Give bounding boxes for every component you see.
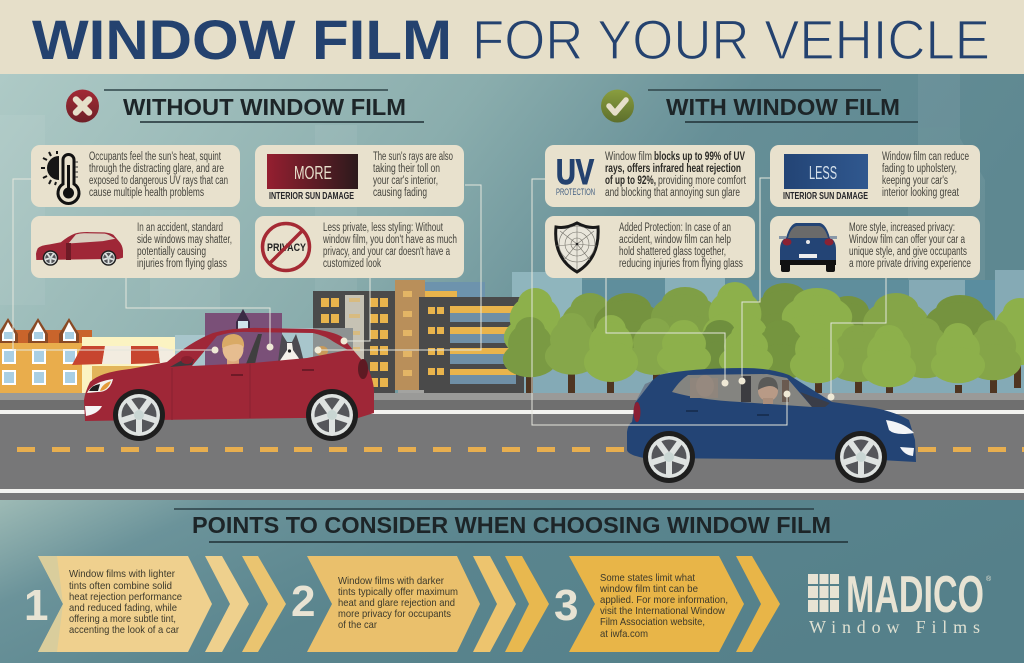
- number 1: 1: [24, 581, 48, 630]
- chevron 2: [307, 556, 480, 652]
- less damage badge: [783, 154, 868, 202]
- text: uv protection: blocks up to 99% of UV: [654, 151, 745, 163]
- connector lines: [13, 178, 886, 425]
- text: darker tints: tints typically offer maximum: [338, 587, 458, 598]
- tan building: [395, 280, 457, 390]
- less damage badge: INTERIOR SUN DAMAGE: [783, 191, 868, 202]
- text: interior fading: taking their toll on: [373, 163, 440, 175]
- text: less privacy: [322, 222, 457, 270]
- madico logo: ®: [986, 575, 992, 583]
- panel: interior damage with film: [770, 145, 980, 207]
- panel: interior damage without film: [255, 145, 464, 207]
- icon: car rear view: [779, 223, 837, 272]
- text: state limits: Some states limit what: [600, 573, 695, 584]
- panel: added protection: [545, 216, 755, 278]
- red car wheels: [113, 389, 165, 441]
- header band: [0, 0, 1024, 74]
- text: reduced fading: keeping your car's: [882, 175, 948, 187]
- text: heat and glare: cause multiple health problems: [89, 187, 204, 199]
- text: state limits: applied. For more information,: [600, 595, 728, 606]
- title: [32, 8, 990, 71]
- panel: heat and glare: [31, 145, 240, 207]
- text: more style: More style, increased privacy:: [849, 222, 955, 234]
- dark building A: [313, 291, 395, 400]
- title: FOR YOUR VEHICLE: [472, 8, 990, 71]
- text: reduced fading: fading to upholstery,: [882, 163, 957, 175]
- text: uv protection: providing more comfort: [658, 175, 747, 187]
- text: uv protection: [605, 151, 747, 199]
- madico logo: [808, 566, 992, 637]
- blue back building: [425, 282, 485, 302]
- text: less privacy: privacy, and your car doesn't have a: [323, 246, 450, 258]
- final chevron: [736, 556, 780, 652]
- blue car lights: [886, 420, 914, 434]
- red car: [84, 328, 374, 441]
- text: more style: a more private driving experience: [849, 258, 971, 270]
- text: less privacy: Less private, less styling: Without: [323, 222, 444, 234]
- logo grid: [808, 574, 839, 612]
- panel: shattered side windows: [31, 216, 240, 278]
- text: added protection: Added Protection: In case of an: [619, 222, 731, 234]
- text: state limits: [599, 573, 728, 640]
- house: [0, 318, 92, 395]
- icon: no privacy: [262, 224, 310, 270]
- text: darker tints: of the car: [338, 620, 378, 631]
- less damage badge: LESS: [809, 163, 837, 183]
- text: state limits: Film Association website,: [600, 617, 705, 628]
- text: shattered windows: In an accident, standard: [137, 222, 223, 234]
- heading: with window film: WITH WINDOW FILM: [666, 94, 900, 120]
- panel: uv protection: [545, 145, 755, 207]
- text: uv protection: Window film: [605, 151, 652, 163]
- connector dots: [212, 338, 834, 400]
- more damage badge: [267, 154, 358, 202]
- text: interior fading: [373, 151, 453, 199]
- icon: uv: UV: [556, 153, 595, 192]
- text: shattered windows: injuries from flying glass: [137, 258, 227, 270]
- text: more style: unique style, and give occupants: [849, 246, 967, 258]
- logo subtitle: Window Films: [809, 617, 980, 637]
- title: WINDOW FILM: [32, 8, 452, 71]
- text: lighter tints: tints often combine solid: [69, 581, 172, 592]
- chevrons after point 1: [205, 556, 286, 652]
- point 1: [24, 556, 212, 652]
- road: [0, 393, 1024, 500]
- text: shattered windows: [137, 222, 232, 270]
- city buildings: [205, 280, 524, 400]
- text: state limits: window film tint can be: [599, 584, 698, 595]
- text: added protection: accident, window film can help: [619, 234, 731, 246]
- trees: [503, 282, 1024, 387]
- chevron 1: [38, 556, 212, 652]
- text: shattered windows: potentially causing: [137, 246, 206, 258]
- icon: cracked glass shield: [556, 223, 598, 272]
- text: heat and glare: through the distracting glare, and are: [89, 163, 224, 175]
- heading: points to consider: POINTS TO CONSIDER WHEN CHOOSING WINDOW FILM: [192, 512, 831, 538]
- icon: green check: [601, 90, 634, 122]
- text: reduced fading: interior looking great: [882, 187, 960, 199]
- more damage badge: MORE: [294, 163, 332, 183]
- text: heat and glare: [89, 151, 228, 199]
- text: added protection: reducing injuries from flying glass: [619, 258, 743, 270]
- icon: red x: [66, 90, 99, 122]
- number 2: 2: [291, 577, 315, 626]
- text: darker tints: more privacy for occupants: [338, 609, 451, 620]
- backdrop skyline behind trees: [512, 270, 1024, 402]
- text: uv protection: of up to 92%,: [605, 175, 656, 187]
- panel: less privacy: [255, 216, 464, 278]
- icon: small red car: [36, 232, 123, 266]
- text: interior fading: The sun's rays are also: [373, 151, 453, 163]
- text: added protection: hold shattered glass together,: [619, 246, 726, 258]
- text: uv protection: rays, offers infrared heat rejection: [605, 163, 741, 175]
- text: darker tints: [338, 576, 458, 631]
- blue car wheels: [643, 431, 695, 483]
- text: uv protection: and blocking that annoying sun glare: [605, 187, 740, 199]
- point 2: [291, 556, 480, 652]
- text: reduced fading: Window film can reduce: [882, 151, 969, 163]
- icon: uv: PROTECTION: [556, 187, 595, 198]
- chevron 3: [569, 556, 744, 652]
- lane dashes: [17, 447, 1024, 452]
- more damage badge: INTERIOR SUN DAMAGE: [269, 191, 354, 202]
- text: lighter tints: accenting the look of a car: [69, 625, 180, 636]
- text: darker tints: Window films with darker: [338, 576, 445, 587]
- icon: no privacy: PRIVACY: [267, 242, 307, 254]
- text: reduced fading: [882, 151, 969, 199]
- faint skyline: [0, 74, 985, 310]
- scenery seen through red car windows: [175, 328, 353, 370]
- text: lighter tints: offering a more subtle tint,: [69, 614, 176, 625]
- text: interior fading: your car's interior,: [373, 175, 438, 187]
- text: shattered windows: side windows may shatter,: [137, 234, 232, 246]
- dark building B: [398, 297, 524, 400]
- blue car: [627, 368, 916, 483]
- icon: sun and thermometer: [41, 151, 79, 203]
- bottom panel background: [0, 500, 1024, 663]
- text: less privacy: customized look: [323, 258, 381, 270]
- text: added protection: [619, 222, 743, 270]
- text: more style: Window film can offer your car a: [849, 234, 965, 246]
- panel: more style: [770, 216, 980, 278]
- text: state limits: visit the International Window: [600, 606, 726, 617]
- point 3: [554, 556, 744, 652]
- blue car occupants: [690, 375, 789, 404]
- text: lighter tints: and reduced fading, while: [69, 603, 177, 614]
- red car occupants: [222, 334, 328, 370]
- headlight: [87, 379, 113, 393]
- tree trunks: [526, 360, 1021, 401]
- text: state limits: at iwfa.com: [600, 629, 648, 640]
- shop: [72, 337, 182, 396]
- background sky: [0, 74, 1024, 414]
- text: interior fading: causing fading: [373, 187, 427, 199]
- heading: without window film: WITHOUT WINDOW FILM: [123, 94, 406, 120]
- text: lighter tints: heat rejection performance: [69, 592, 182, 603]
- text: lighter tints: Window films with lighter: [69, 569, 176, 580]
- purple building: [205, 309, 282, 398]
- text: darker tints: heat and glare rejection and: [338, 598, 455, 609]
- chevrons after point 2: [473, 556, 549, 652]
- number 3: 3: [554, 581, 578, 630]
- text: heat and glare: exposed to dangerous UV rays that can: [89, 175, 228, 187]
- text: lighter tints: [69, 569, 182, 636]
- text: heat and glare: Occupants feel the sun's heat, squint: [89, 151, 222, 163]
- text: more style: [849, 222, 971, 270]
- text: less privacy: window film, you don't have as much: [322, 234, 457, 246]
